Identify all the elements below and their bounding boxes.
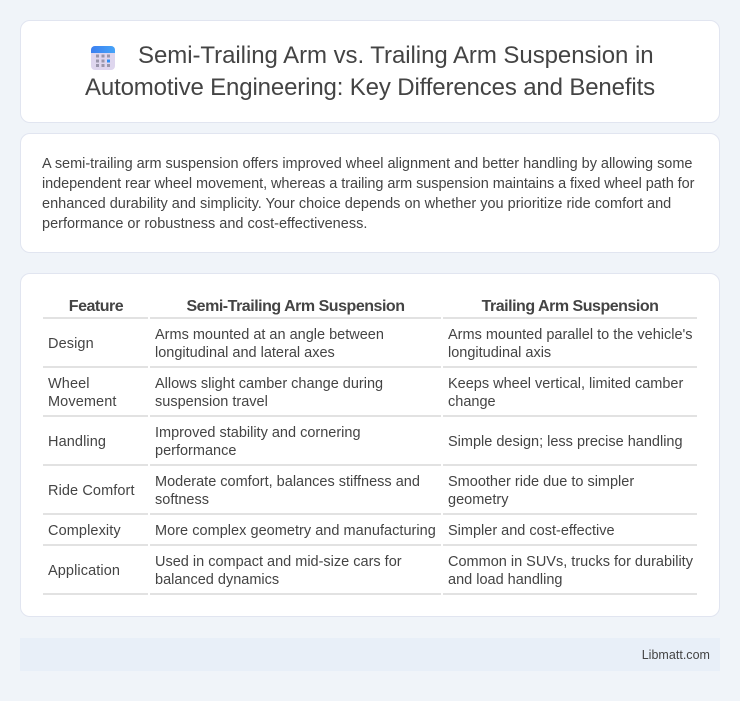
application: semi-trailing: balanced dynamics	[155, 572, 279, 588]
application: semi-trailing	[155, 554, 402, 588]
complexity: semi-trailing: More complex geometry and manufacturing	[155, 523, 436, 539]
comparison table card	[20, 273, 720, 617]
wheel movement: semi-trailing	[155, 376, 383, 410]
ride comfort: trailing: geometry	[448, 492, 508, 508]
row: design: Design	[48, 336, 94, 352]
row: complexity: Complexity	[48, 523, 121, 539]
wheel movement: trailing	[448, 376, 684, 410]
row: wheel movement: Wheel	[48, 376, 90, 392]
design: trailing	[448, 327, 693, 361]
heading line 1: Semi-Trailing Arm vs. Trailing Arm Suspension in	[138, 42, 654, 69]
design: semi-trailing: Arms mounted at an angle between	[155, 327, 384, 343]
footer source: Libmatt.com	[642, 648, 710, 662]
ride comfort: semi-trailing: Moderate comfort, balances stiffness and	[155, 474, 420, 490]
row: application: Application	[48, 563, 120, 579]
row: handling: Handling	[48, 434, 106, 450]
ride comfort: trailing: Smoother ride due to simpler	[448, 474, 634, 490]
heading line 2: Automotive Engineering: Key Differences and Benefits	[85, 74, 655, 101]
design: semi-trailing	[155, 327, 384, 361]
wheel movement: trailing: change	[448, 394, 496, 410]
intro text	[42, 156, 694, 232]
footer bar	[20, 638, 720, 671]
row: wheel movement	[48, 376, 116, 410]
wheel movement: semi-trailing: Allows slight camber change during	[155, 376, 383, 392]
table header: trailing arm suspension: Trailing Arm Suspension	[482, 298, 658, 315]
handling: trailing: Simple design; less precise handling	[448, 434, 683, 450]
title card	[20, 20, 720, 123]
application: semi-trailing: Used in compact and mid-size cars for	[155, 554, 402, 570]
handling: semi-trailing: performance	[155, 443, 236, 459]
wheel movement: semi-trailing: suspension travel	[155, 394, 268, 410]
intro text: performance or robustness and cost-effectiveness.	[42, 216, 367, 232]
application: trailing	[448, 554, 693, 588]
table header: feature: Feature	[69, 298, 123, 315]
intro text: independent rear wheel movement, whereas a trailing arm suspension maintains a fixed wheel path for	[42, 176, 694, 192]
wheel movement: trailing: Keeps wheel vertical, limited camber	[448, 376, 683, 392]
handling: semi-trailing	[155, 425, 361, 459]
design: trailing: longitudinal axis	[448, 345, 551, 361]
intro text: enhanced durability and simplicity. Your choice depends on whether you prioritize ride comfort and	[42, 196, 671, 212]
ride comfort: semi-trailing: softness	[155, 492, 209, 508]
table header: semi-trailing arm suspension: Semi-Trailing Arm Suspension	[186, 298, 404, 315]
row: wheel movement: Movement	[48, 394, 116, 410]
application: trailing: and load handling	[448, 572, 562, 588]
handling: semi-trailing: Improved stability and cornering	[155, 425, 361, 441]
ride comfort: semi-trailing	[155, 474, 420, 508]
design: trailing: Arms mounted parallel to the vehicle's	[448, 327, 693, 343]
complexity: trailing: Simpler and cost-effective	[448, 523, 615, 539]
ride comfort: trailing	[448, 474, 634, 508]
intro card	[20, 133, 720, 253]
design: semi-trailing: longitudinal and lateral axes	[155, 345, 335, 361]
row: ride comfort: Ride Comfort	[48, 483, 135, 499]
icon: calendar grid	[91, 46, 115, 70]
application: trailing: Common in SUVs, trucks for durability	[448, 554, 693, 570]
intro text: A semi-trailing arm suspension offers improved wheel alignment and better handling by allowing some	[42, 156, 692, 172]
